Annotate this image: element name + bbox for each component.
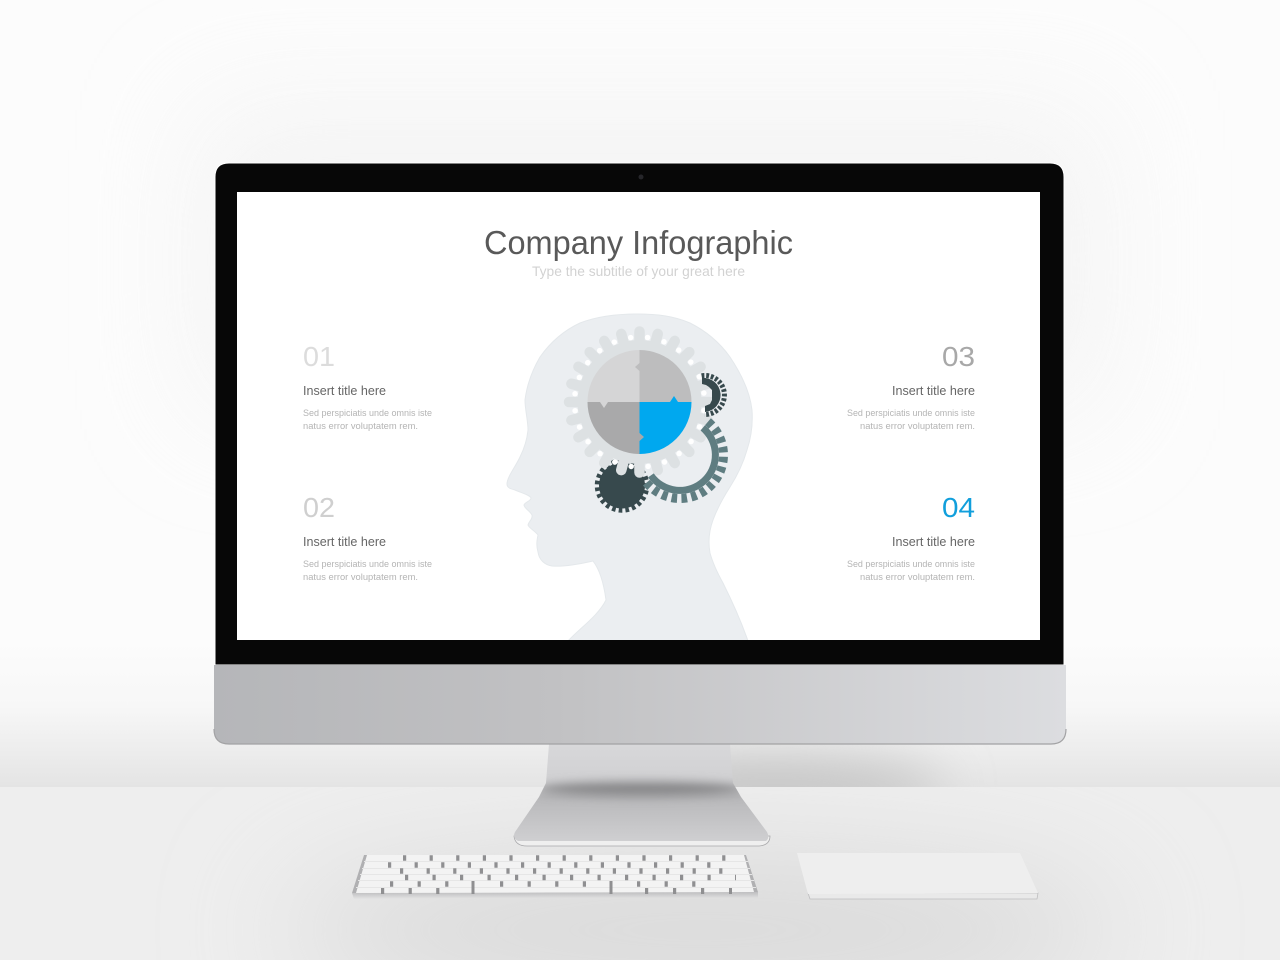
quadrant bottom left xyxy=(588,402,640,454)
item 02: Insert title here xyxy=(303,534,386,549)
subtitle: Type the subtitle of your great here xyxy=(532,263,745,279)
teal arc gear xyxy=(644,422,723,498)
small dark gear right xyxy=(702,376,724,415)
desk surface xyxy=(0,787,1280,960)
item 03: 03 xyxy=(942,341,975,372)
large light gear xyxy=(569,332,710,472)
monitor bezel xyxy=(215,163,1064,665)
quadrant bottom right xyxy=(640,402,692,454)
item 04: natus error voluptatem rem. xyxy=(860,572,975,583)
monitor xyxy=(214,163,1066,744)
item 02: natus error voluptatem rem. xyxy=(303,572,418,583)
screen xyxy=(237,192,1040,640)
keyboard xyxy=(352,855,758,899)
webcam xyxy=(638,174,644,180)
monitor chin xyxy=(214,665,1066,744)
item 02 xyxy=(303,492,432,583)
item 01 xyxy=(303,341,432,432)
head illustration xyxy=(507,314,752,641)
quadrant top left xyxy=(588,350,640,402)
trackpad xyxy=(797,853,1038,899)
item 04 xyxy=(847,492,975,583)
item 02: 02 xyxy=(303,492,335,523)
item 01: 01 xyxy=(303,341,335,372)
slide content xyxy=(303,224,975,641)
item 03: Sed perspiciatis unde omnis iste xyxy=(847,408,975,419)
title: Company Infographic xyxy=(484,224,793,261)
dark gear bottom xyxy=(598,461,646,510)
quadrant top right xyxy=(640,350,692,402)
item 04: 04 xyxy=(942,492,975,523)
item 04: Insert title here xyxy=(892,534,975,549)
item 03 xyxy=(847,341,975,432)
item 03: natus error voluptatem rem. xyxy=(860,421,975,432)
item 02: Sed perspiciatis unde omnis iste xyxy=(303,559,432,570)
item 04: Sed perspiciatis unde omnis iste xyxy=(847,559,975,570)
item 01: Sed perspiciatis unde omnis iste xyxy=(303,408,432,419)
background wall xyxy=(0,720,1280,787)
item 01: Insert title here xyxy=(303,383,386,398)
item 01: natus error voluptatem rem. xyxy=(303,421,418,432)
monitor stand xyxy=(514,744,770,846)
item 03: Insert title here xyxy=(892,383,975,398)
head silhouette xyxy=(507,314,752,641)
pie of four quadrants xyxy=(588,350,692,454)
